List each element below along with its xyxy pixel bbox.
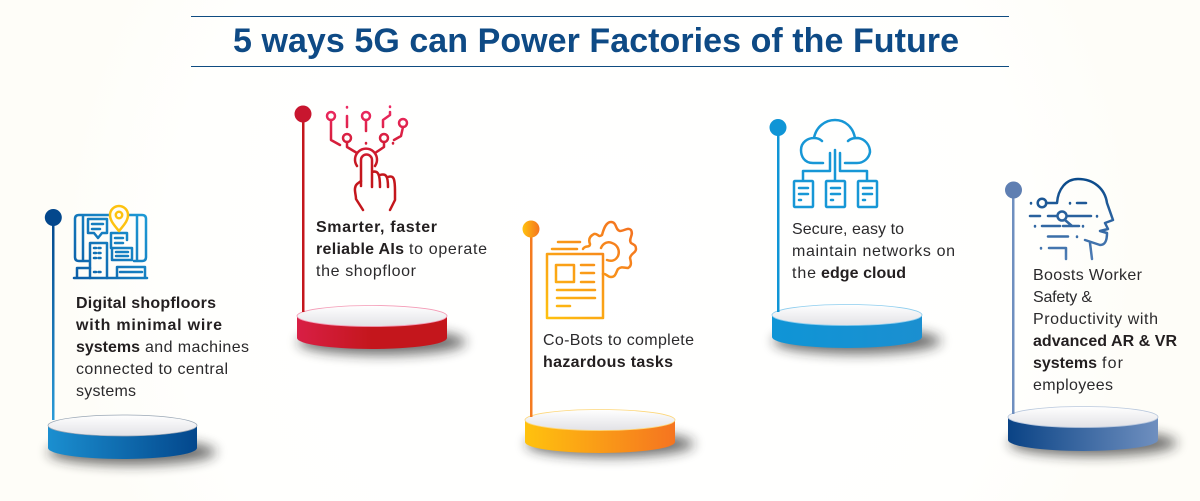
icon: cloud and servers: [794, 120, 877, 207]
podium: light blue: [772, 304, 941, 354]
icon: document and gear: [547, 222, 636, 318]
text block: systems: [1033, 355, 1097, 372]
title: 5 ways 5G can Power Factories of the Future: [233, 22, 959, 60]
text block: maintain networks on: [792, 243, 955, 260]
text block: systems: [76, 383, 136, 400]
podium: red: [297, 306, 466, 355]
pole with marker: [522, 220, 540, 417]
panel: digital shopfloors: [45, 206, 249, 465]
text block: Digital shopfloors: [76, 295, 216, 312]
text block: edge cloud: [821, 265, 906, 282]
text block: reliable AIs: [316, 241, 404, 258]
text block: [1033, 267, 1177, 394]
text block: [543, 332, 694, 371]
text block: employees: [1033, 377, 1113, 394]
text block: the shopfloor: [316, 263, 417, 280]
podium: navy: [1008, 406, 1177, 456]
pole with marker: [294, 106, 312, 312]
icon: head with data: [1030, 179, 1113, 259]
panel: edge cloud: [770, 119, 955, 354]
pole with marker: [770, 119, 786, 312]
text block: the: [792, 265, 816, 282]
podium: orange: [525, 410, 694, 457]
pole with marker: [45, 209, 62, 420]
icon: touch network: [327, 106, 407, 210]
podium: blue: [48, 415, 216, 465]
text block: Productivity with: [1033, 311, 1158, 328]
text block: Co-Bots to complete: [543, 332, 694, 349]
text block: connected to central: [76, 361, 228, 378]
pole with marker: [1005, 182, 1022, 414]
text block: [316, 219, 487, 280]
text block: [792, 221, 955, 282]
text block: hazardous tasks: [543, 354, 673, 371]
text block: for: [1102, 355, 1124, 372]
text block: to operate: [409, 241, 487, 258]
text block: Safety &: [1033, 289, 1092, 306]
text block: systems: [76, 339, 140, 356]
panel: worker safety: [1005, 179, 1177, 456]
text block: [75, 295, 249, 400]
text block: Secure, easy to: [792, 221, 904, 238]
icon: smart factory screen: [74, 206, 147, 278]
text block: with minimal wire: [75, 317, 222, 334]
panel: smarter AI: [294, 106, 487, 355]
text block: and machines: [145, 339, 249, 356]
text block: Smarter, faster: [316, 219, 437, 236]
text block: advanced AR & VR: [1033, 333, 1177, 350]
text block: Boosts Worker: [1033, 267, 1143, 284]
panel: co-bots: [522, 220, 694, 457]
